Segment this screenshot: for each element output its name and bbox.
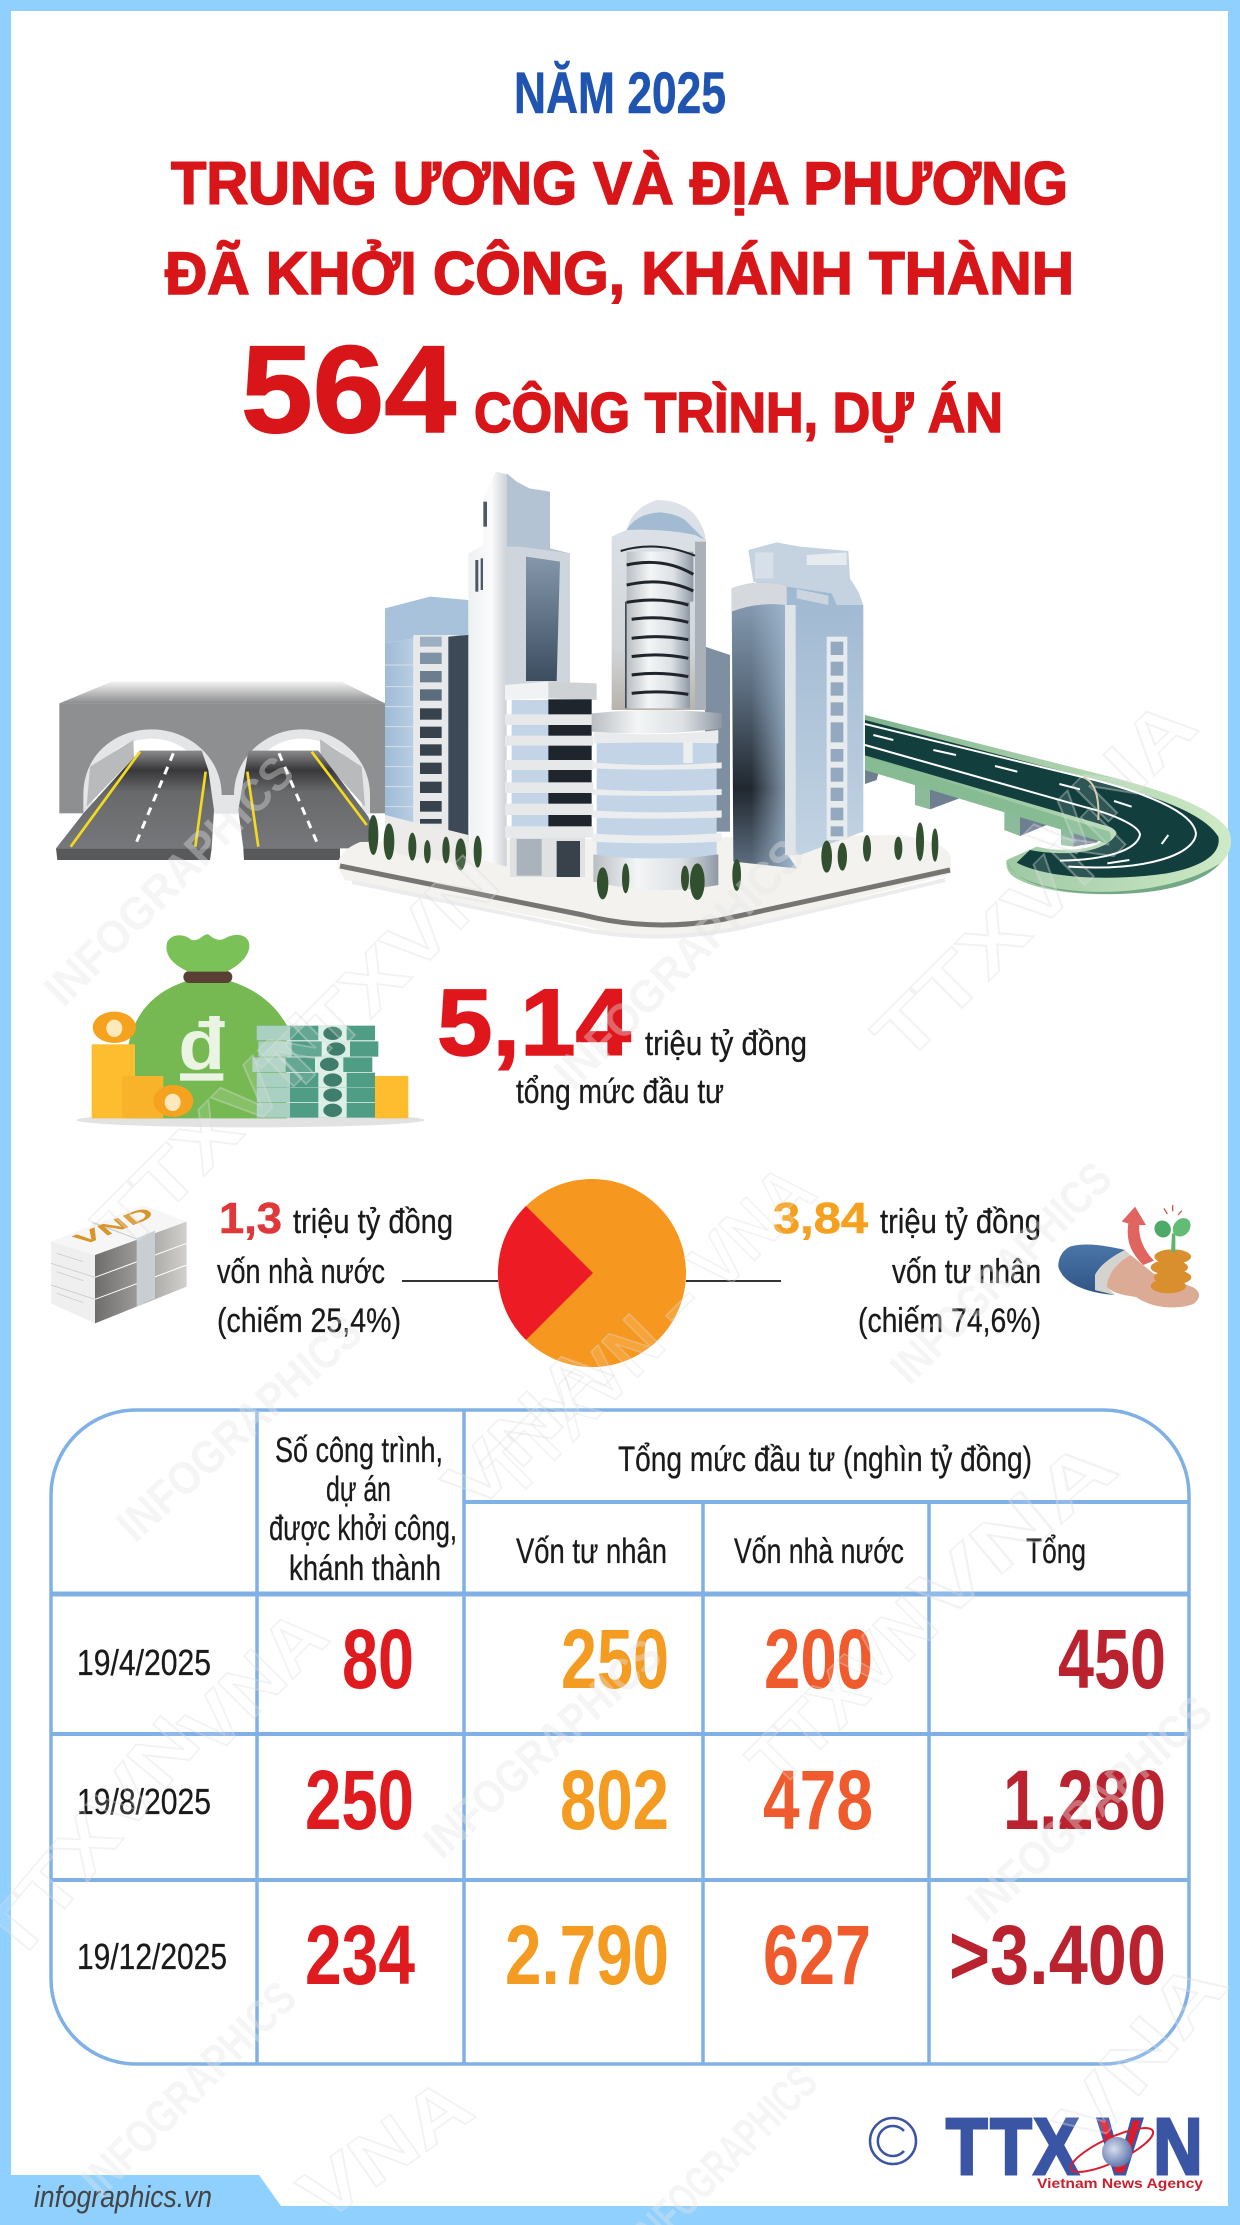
stat: private capital	[773, 1194, 1041, 1340]
table header: được khởi công,	[269, 1509, 457, 1548]
stat: state capital: 1,3	[219, 1194, 282, 1243]
stat: private capital: vốn tư nhân	[892, 1253, 1041, 1291]
logo: TTXVN Vietnam News Agency: X	[1034, 2102, 1079, 2191]
stat: private capital: 3,84	[773, 1194, 869, 1243]
table header: Tổng	[1026, 1532, 1086, 1571]
table header: Số công trình,	[275, 1431, 443, 1470]
table row: 19/12/2025: 627	[763, 1908, 871, 2002]
logo: TTXVN Vietnam News Agency: V	[1097, 2102, 1143, 2191]
table row: 19/4/2025: 450	[1058, 1612, 1166, 1706]
table row: 19/4/2025: 250	[561, 1612, 669, 1706]
investment total block	[77, 934, 807, 1127]
watermarks: INFOGRAPHICS	[34, 746, 304, 1016]
watermarks: TTXVN	[77, 997, 347, 1267]
table row: 19/8/2025: 802	[560, 1753, 669, 1847]
building: curved tower	[612, 500, 706, 710]
table row: 19/4/2025	[77, 1612, 1166, 1706]
icon: money bag and cash: đ	[178, 1003, 225, 1085]
watermarks: TTXVN – VNA	[468, 1149, 830, 1511]
table header: khánh thành	[289, 1549, 441, 1588]
table row: 19/12/2025: >3.400	[949, 1908, 1166, 2002]
watermarks: TTXVN	[244, 840, 514, 1110]
capital split block	[51, 1179, 1199, 1367]
table grid	[51, 1410, 1189, 2064]
trees	[368, 815, 938, 900]
watermarks: INFOGRAPHICS	[544, 829, 814, 1099]
watermarks: VNA	[427, 1327, 627, 1527]
table row: 19/12/2025: 2.790	[505, 1908, 669, 2002]
watermarks	[0, 682, 1240, 2225]
icon: platform base	[338, 835, 951, 939]
logo: TTXVN Vietnam News Agency: Vietnam News Agency	[1037, 2175, 1203, 2191]
table row: 19/8/2025: 1.280	[1003, 1753, 1166, 1847]
stat: private capital: triệu tỷ đồng	[880, 1203, 1041, 1241]
stat: state capital: vốn nhà nước	[217, 1253, 385, 1291]
table row: 19/4/2025: 19/4/2025	[77, 1642, 211, 1683]
logo: TTXVN Vietnam News Agency: T	[946, 2102, 988, 2191]
icon: money bag and cash	[77, 934, 425, 1127]
logo: TTXVN Vietnam News Agency: N	[1153, 2102, 1203, 2191]
table row: 19/4/2025: 200	[764, 1612, 873, 1706]
icon: VND bundle	[51, 1204, 187, 1323]
title: line 1: TRUNG ƯƠNG VÀ ĐỊA PHƯƠNG	[171, 150, 1068, 217]
watermarks: VNA	[1012, 682, 1212, 882]
data table	[51, 1410, 1189, 2064]
table header: Vốn tư nhân	[516, 1532, 667, 1571]
stat: state capital: (chiếm 25,4%)	[217, 1302, 401, 1340]
table row: 19/8/2025: 19/8/2025	[77, 1781, 211, 1822]
table row: 19/12/2025: 234	[305, 1908, 415, 2002]
table header: dự án	[326, 1470, 391, 1509]
table header: Tổng mức đầu tư (nghìn tỷ đồng)	[618, 1440, 1032, 1479]
stat: total investment	[437, 970, 807, 1111]
icon: hand with coins and sprout	[1058, 1205, 1199, 1307]
stat: state capital: triệu tỷ đồng	[293, 1203, 453, 1241]
watermarks: INFOGRAPHICS	[413, 1628, 671, 1868]
table row: 19/8/2025: 250	[305, 1753, 414, 1847]
building: tall white tower	[468, 472, 570, 867]
table row: 19/12/2025: 19/12/2025	[77, 1936, 227, 1977]
building: low slab front	[505, 682, 597, 877]
icon: VND bundle: VND	[68, 1204, 160, 1249]
stat: total investment: 5,14	[437, 970, 631, 1076]
logo: TTXVN Vietnam News Agency: T	[990, 2102, 1032, 2191]
stat: private capital: (chiếm 74,6%)	[858, 1302, 1041, 1340]
table header: Vốn nhà nước	[734, 1532, 904, 1571]
title block	[165, 61, 1074, 459]
copyright symbol	[870, 2118, 916, 2164]
stat: total investment: tổng mức đầu tư	[516, 1073, 724, 1111]
back block	[705, 647, 730, 832]
icon: tunnel	[56, 682, 385, 860]
title: big number 564: 564	[241, 321, 456, 459]
watermarks: VNA	[165, 1593, 343, 1771]
table header	[269, 1431, 1086, 1588]
building: right tower	[732, 542, 863, 868]
illustration: infrastructure	[56, 472, 1231, 939]
table row: 19/8/2025: 478	[763, 1753, 873, 1847]
title: year: NĂM 2025	[514, 61, 726, 126]
watermarks: VNA	[1038, 1943, 1240, 2165]
title: line 2: ĐÃ KHỞI CÔNG, KHÁNH THÀNH	[165, 240, 1074, 307]
icon: highway overpass	[865, 715, 1231, 894]
pie chart: state vs private capital	[402, 1179, 781, 1367]
watermarks: VNA	[895, 1422, 1132, 1639]
watermarks: INFOGRAPHICS	[107, 1305, 372, 1551]
watermarks: INFOGRAPHICS	[71, 1971, 306, 2206]
building: left slab	[385, 597, 468, 865]
title: unit: CÔNG TRÌNH, DỰ ÁN	[474, 380, 1003, 445]
watermarks: TTXVN	[731, 1581, 953, 1803]
stat: state capital	[217, 1194, 453, 1340]
table row: 19/4/2025: 80	[342, 1612, 414, 1706]
icon: city buildings	[368, 472, 938, 900]
watermarks: TTXVN	[856, 792, 1141, 1077]
table row: 19/12/2025	[77, 1908, 1166, 2002]
footer tab: website	[11, 2175, 281, 2225]
watermarks: INFOGRAPHICS	[880, 1152, 1122, 1394]
logo: TTXVN Vietnam News Agency	[946, 2102, 1203, 2191]
overpass pillars	[865, 770, 1102, 847]
footer tab: website: infographics.vn	[34, 2179, 212, 2214]
building: round front	[592, 710, 722, 890]
stat: total investment: triệu tỷ đồng	[645, 1025, 807, 1063]
table row: 19/8/2025	[77, 1753, 1166, 1847]
